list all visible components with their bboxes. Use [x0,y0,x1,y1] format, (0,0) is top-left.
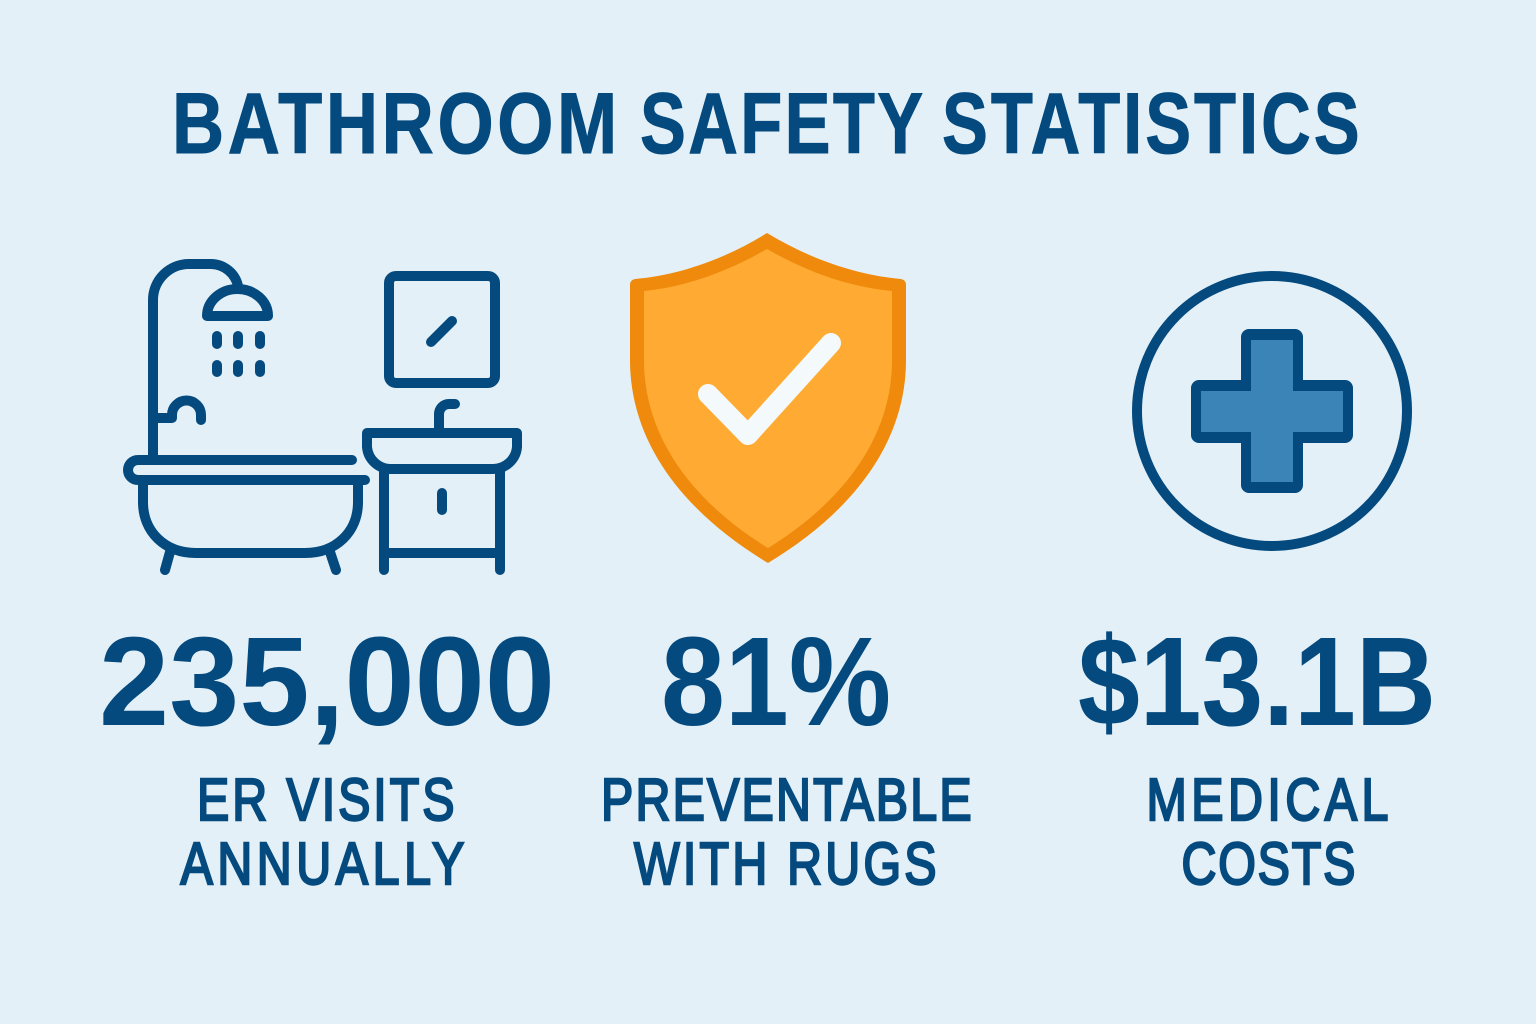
cross fill [1201,340,1343,482]
label: preventable with rugs [601,768,972,897]
shield fill [644,249,892,548]
stat: $13.1B: $13.1B [1078,611,1436,752]
icon: shield with check mark [630,233,906,563]
title [172,75,1360,172]
title: BATHROOM [172,75,617,171]
shower head [207,289,268,316]
sink basin [367,433,517,469]
circle [1137,276,1407,546]
label: medical costs: COSTS [1182,832,1355,897]
icon: medical cross in circle [1137,276,1407,546]
tub body [143,480,358,553]
vanity cabinet [384,469,500,570]
cabinet handle [437,493,447,510]
label: preventable with rugs: WITH RUGS [634,832,937,897]
water drops [217,336,260,372]
label: ER visits annually: ER VISITS [197,768,454,833]
label: medical costs: MEDICAL [1146,768,1388,833]
stat: 235,000: 235,000 [99,611,555,752]
tub faucet [153,400,201,420]
mirror [389,276,495,383]
sink faucet [439,404,455,430]
tub feet [165,552,336,570]
shower pipe [153,264,238,458]
label: preventable with rugs: PREVENTABLE [601,768,972,833]
label: ER visits annually: ANNUALLY [180,832,464,897]
stat: 81%: 81% [661,611,891,752]
label: ER visits annually [180,768,464,897]
tub rim [128,460,365,480]
label: medical costs [1146,768,1388,897]
mirror glint [431,321,452,342]
shield border [630,233,906,563]
check mark [708,343,831,435]
title: SAFETY [640,76,923,172]
icon: bathroom with tub, shower and sink [128,264,517,570]
title: STATISTICS [942,76,1360,172]
cross outline [1191,329,1353,493]
